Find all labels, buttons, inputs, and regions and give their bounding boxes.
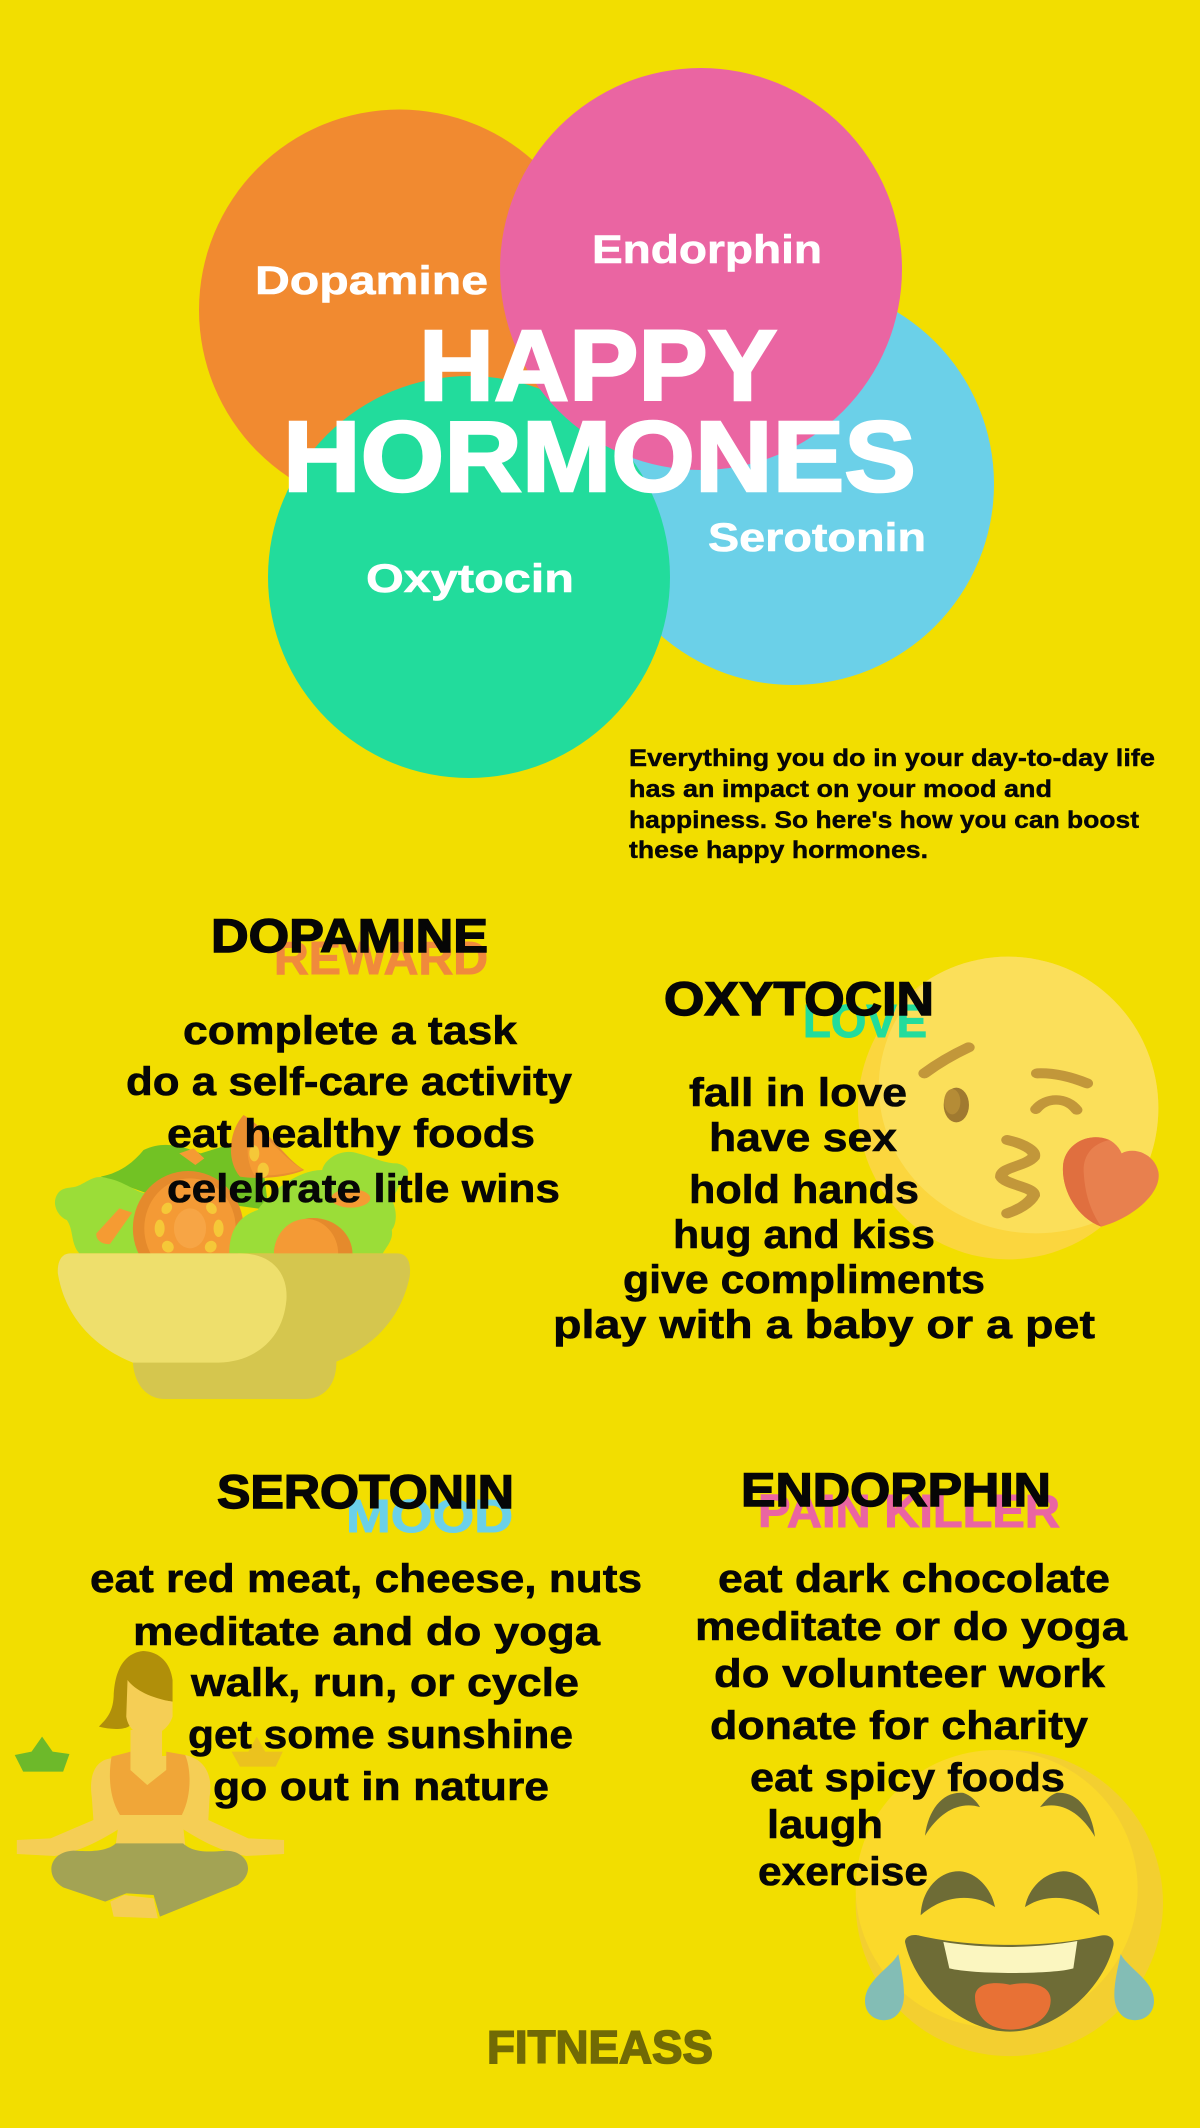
panel: serotonin [90, 1465, 642, 1809]
icon: heart [1063, 1137, 1159, 1227]
heading: oxytocin: OXYTOCIN [664, 972, 934, 1025]
circle: serotonin [592, 283, 994, 685]
list: oxytocin activities [553, 1071, 1095, 1347]
list: serotonin activities: go out in nature [213, 1765, 549, 1809]
title: HORMONES [283, 401, 916, 513]
intro text: happiness. So here's how you can boost [629, 807, 1139, 834]
list: oxytocin activities: give compliments [623, 1258, 985, 1302]
intro text: Everything you do in your day-to-day life [629, 745, 1155, 772]
list: oxytocin activities: hold hands [689, 1168, 919, 1212]
heading: dopamine: DOPAMINE [211, 909, 488, 962]
list: endorphin activities: donate for charity [710, 1704, 1089, 1748]
panel: dopamine [126, 909, 573, 1211]
list: serotonin activities: get some sunshine [188, 1713, 573, 1757]
list: endorphin activities [695, 1557, 1128, 1894]
circle: dopamine [199, 110, 600, 510]
circle: oxytocin [268, 376, 670, 778]
label: Endorphin: Endorphin [592, 228, 822, 272]
panel: oxytocin [553, 972, 1095, 1347]
title [283, 310, 916, 513]
list: endorphin activities: exercise [758, 1850, 928, 1894]
list: oxytocin activities: play with a baby or a pet [553, 1303, 1095, 1347]
list: endorphin activities: eat spicy foods [750, 1756, 1065, 1800]
label: Oxytocin: Oxytocin [366, 557, 574, 601]
title: HAPPY [419, 310, 777, 422]
list: serotonin activities: meditate and do yoga [133, 1610, 601, 1654]
subtitle: mood: MOOD [346, 1490, 513, 1542]
venn circles with hormone names [199, 68, 994, 778]
subtitle: pain killer: PAIN KILLER [758, 1485, 1060, 1537]
label: Dopamine: Dopamine [255, 259, 488, 303]
intro text [629, 745, 1155, 864]
icon: woman meditating [15, 1651, 284, 1918]
list: endorphin activities: eat dark chocolate [718, 1557, 1110, 1601]
list: dopamine activities [126, 1009, 573, 1211]
icon: salad bowl [55, 1115, 410, 1399]
heading: serotonin: SEROTONIN [217, 1465, 514, 1518]
circle: endorphin [500, 68, 902, 470]
list: oxytocin activities: fall in love [689, 1071, 907, 1115]
list: dopamine activities: eat healthy foods [167, 1112, 535, 1156]
subtitle: reward: REWARD [274, 932, 488, 984]
footer brand: FITNEASS [487, 2021, 713, 2073]
heading: endorphin: ENDORPHIN [741, 1463, 1051, 1516]
list: dopamine activities: do a self-care activity [126, 1060, 573, 1104]
list: dopamine activities: complete a task [183, 1009, 518, 1053]
intro text: has an impact on your mood and [629, 776, 1052, 803]
icon: blowing kiss emoji [858, 956, 1159, 1260]
subtitle: love: LOVE [803, 995, 927, 1047]
list: oxytocin activities: hug and kiss [673, 1213, 935, 1257]
icon: laughing emoji [856, 1750, 1163, 2056]
list: oxytocin activities: have sex [709, 1116, 897, 1160]
intro text: these happy hormones. [629, 837, 928, 864]
panel: endorphin [695, 1463, 1128, 1894]
list: endorphin activities: laugh [767, 1803, 883, 1847]
list: endorphin activities: do volunteer work [714, 1652, 1106, 1696]
list: serotonin activities: eat red meat, cheese, nuts [90, 1557, 642, 1601]
list: dopamine activities: celebrate litle wins [167, 1167, 560, 1211]
list: endorphin activities: meditate or do yoga [695, 1605, 1128, 1649]
label: Serotonin: Serotonin [708, 516, 926, 560]
list: serotonin activities: walk, run, or cycle [190, 1661, 579, 1705]
list: serotonin activities [90, 1557, 642, 1809]
